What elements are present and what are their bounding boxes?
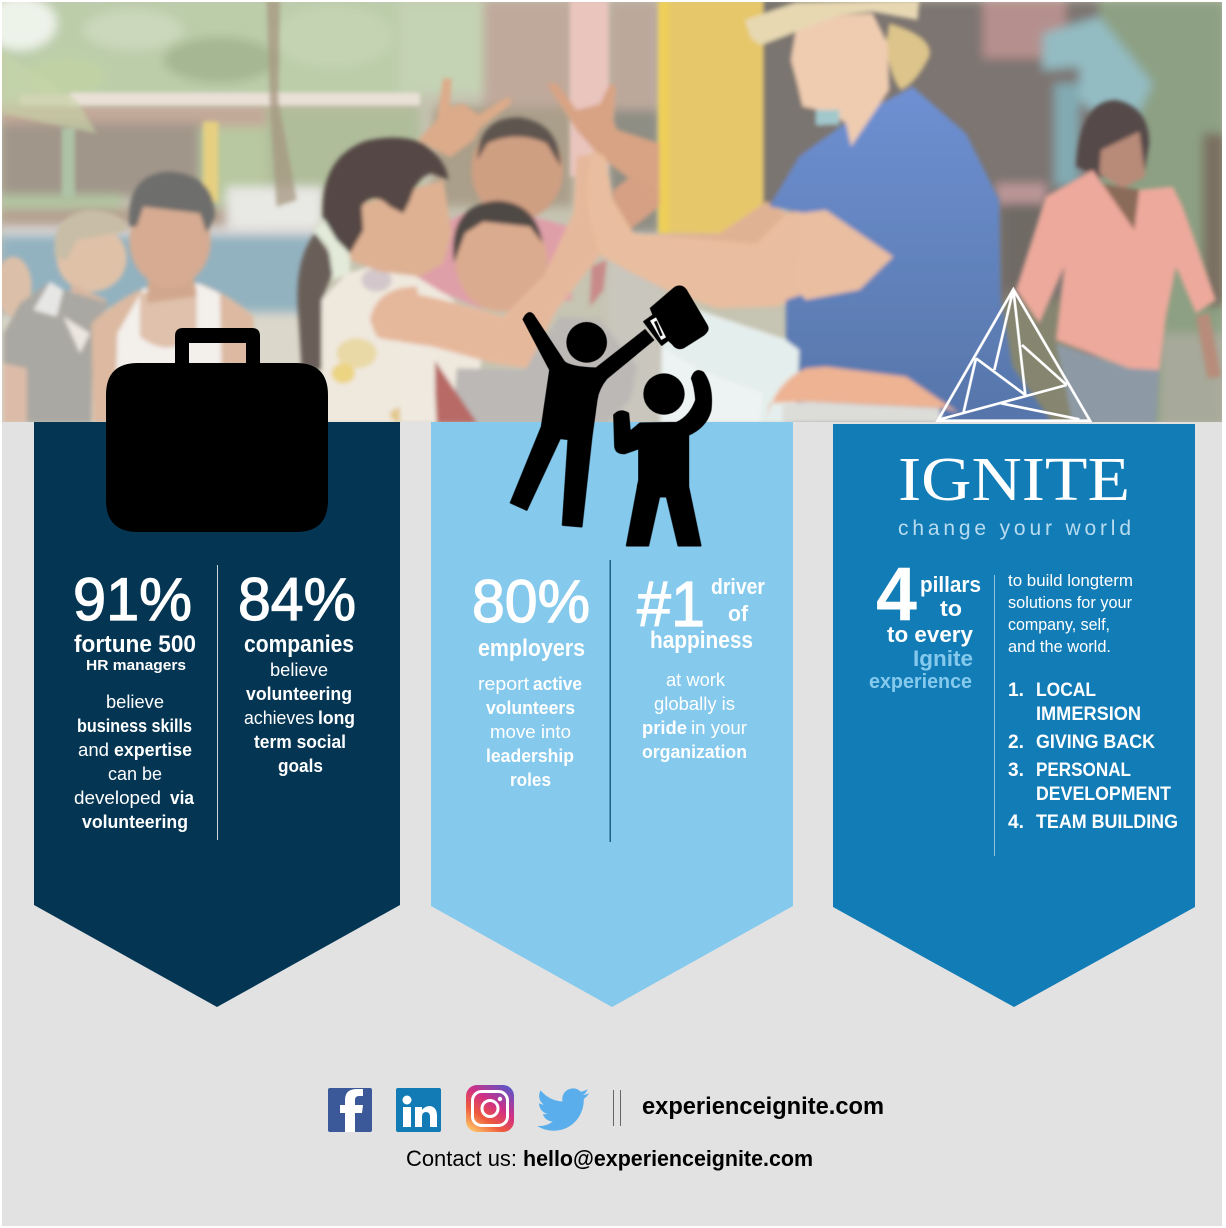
stat: 91% fortune 500 HR managers: expertise [114,740,192,760]
intro text: to build longterm [1008,572,1133,590]
website: experienceignite.com [642,1093,884,1120]
girl's ponytail and dress [297,233,337,370]
icon: facebook [328,1088,372,1132]
stat: 91% fortune 500 HR managers: can be [108,764,162,784]
pillars list: PERSONAL [1036,760,1131,781]
four pillars statement: pillars [920,572,981,597]
tagline: change your world [898,517,1131,540]
stat: 84% companies: 84% [238,566,356,633]
stat: 80% employers: volunteers [486,698,575,718]
pillars list: 4. [1008,812,1024,833]
woman's arm and hand [663,199,787,245]
stat: 84% companies: long [318,708,355,728]
icon: briefcase [106,328,328,532]
face and hair [886,23,930,90]
stat: 91% fortune 500 HR managers: volunteering [82,812,188,832]
pillars list: 3. [1008,760,1024,781]
building roof and tree trunk [0,0,483,423]
red strap [590,260,607,307]
stat: 91% fortune 500 HR managers: 91% [73,566,192,633]
pillars list: LOCAL [1036,680,1096,701]
stat: 80% employers: roles [510,770,551,790]
four pillars statement: to every [887,622,974,647]
photo: volunteer high-fiving children [0,0,1226,427]
pillars list: IMMERSION [1036,704,1141,725]
blue shirt [769,87,1053,423]
icon: two people with briefcase [511,286,711,546]
stat: #1 driver of happiness: globally is [654,694,735,714]
pillars list: 2. [1008,732,1024,753]
four pillars statement: experience [869,671,972,693]
pillars list [1008,680,1178,833]
stat: 91% fortune 500 HR managers: fortune 500 [74,631,196,658]
stat: #1 driver of happiness: in your [691,718,747,738]
stat: 84% companies: companies [244,631,354,658]
towel [766,367,959,423]
far-left child [0,257,32,317]
stat: 91% fortune 500 HR managers: and [78,740,109,760]
pillars list: DEVELOPMENT [1036,784,1171,805]
stat: 91% fortune 500 HR managers: via [170,788,195,808]
intro text [1008,572,1133,656]
background boy [417,203,572,308]
four pillars statement: to [940,596,962,621]
stat: 91% fortune 500 HR managers: developed [74,788,161,808]
woman in pink shirt [1056,343,1159,423]
stat: 84% companies: achieves [244,708,314,728]
stat: 84% companies: volunteering [246,684,352,704]
stat: 80% employers [472,568,590,790]
four pillars statement: 4 [876,552,917,637]
icon: Ignite triangle logo [938,289,1090,421]
intro text: solutions for your [1008,594,1132,612]
stat: #1 driver of happiness: #1 [637,568,705,640]
stat: 80% employers: employers [478,635,585,662]
pillars list: GIVING BACK [1036,732,1155,753]
stat: #1 driver of happiness: of [728,601,749,626]
contact line: Contact us: [406,1146,517,1171]
icon: instagram [466,1085,514,1132]
grey shirt child [453,317,637,423]
boy in white tank top [92,283,258,423]
hand gestures [418,78,512,157]
icon: twitter [537,1088,589,1131]
icon: linkedin [396,1088,441,1132]
girl's head and arm [350,180,452,277]
dark doorway [763,0,823,207]
stat: #1 driver of happiness [637,568,765,762]
boy in grey shirt [57,225,127,292]
stat: 91% fortune 500 HR managers: HR managers [86,657,186,674]
intro text: and the world. [1008,638,1111,656]
front boy [456,212,548,312]
railing [658,308,803,422]
stat: 80% employers: leadership [486,746,574,766]
stat: #1 driver of happiness: organization [642,742,747,762]
four pillars statement: Ignite [913,646,973,671]
intro text: company, self, [1008,616,1110,634]
stat: 80% employers: move into [490,722,571,742]
stat: 80% employers: 80% [472,568,590,635]
four pillars statement [869,552,981,693]
pillars list: TEAM BUILDING [1036,812,1178,833]
stat: 84% companies [238,566,356,776]
stat: 80% employers: report [478,674,529,694]
stat: 84% companies: term social [254,732,346,752]
cap [745,0,919,45]
stat: 91% fortune 500 HR managers [73,566,196,832]
stat: 91% fortune 500 HR managers: business skills [77,716,192,736]
stat: 84% companies: goals [278,756,323,776]
Ignite wordmark: IGNITE [898,446,1130,514]
stat: #1 driver of happiness: driver [711,574,765,599]
stat: 91% fortune 500 HR managers: believe [106,692,164,712]
panel: light blue banner [431,422,793,1007]
arm over shirt [793,210,893,300]
footer: social links [328,1085,884,1132]
stat: #1 driver of happiness: happiness [650,627,753,654]
stat: 84% companies: believe [270,660,328,680]
pillars list: 1. [1008,680,1024,701]
panel: mid blue banner [833,424,1195,1007]
yellow pillar [658,0,763,233]
pink pillar [570,0,608,177]
contact line: hello@experienceignite.com [523,1146,813,1171]
stat: #1 driver of happiness: at work [666,670,726,690]
panel: dark navy banner [34,422,400,1007]
stat: 80% employers: active [533,674,582,694]
stat: #1 driver of happiness: pride [642,718,687,738]
